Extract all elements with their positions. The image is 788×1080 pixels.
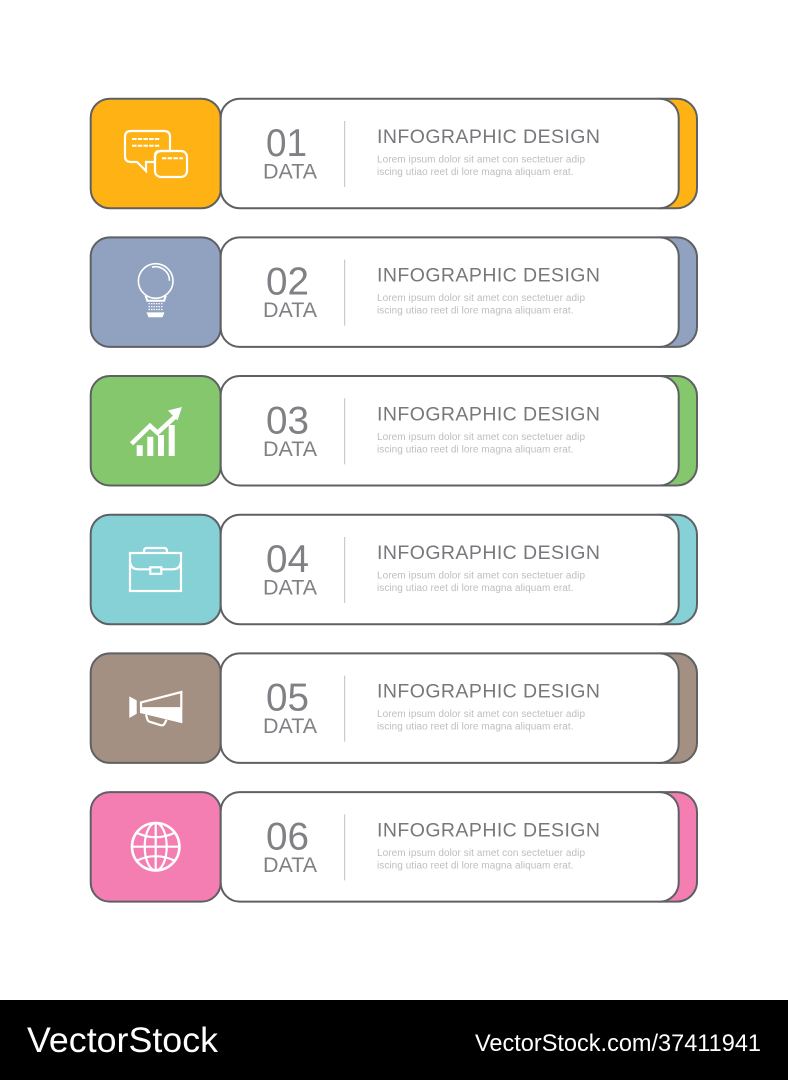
body text: Lorem ipsum dolor sit amet con sectetuer adip <box>377 154 585 166</box>
body text: Lorem ipsum dolor sit amet con sectetuer adip <box>377 570 585 582</box>
body text: iscing utiao reet di lore magna aliquam erat. <box>377 860 574 871</box>
heading: INFOGRAPHIC DESIGN <box>377 542 600 564</box>
body text: Lorem ipsum dolor sit amet con sectetuer adip <box>377 848 585 859</box>
number 01: 01 <box>266 122 307 165</box>
label DATA: DATA <box>263 299 317 322</box>
divider <box>344 676 345 742</box>
back tab: green <box>640 376 697 486</box>
icon panel: brown <box>91 653 221 763</box>
icon panel: teal <box>91 515 221 624</box>
row 03 <box>91 376 697 486</box>
icon panel: blue <box>91 237 221 347</box>
body text: Lorem ipsum dolor sit amet con sectetuer adip <box>377 432 585 443</box>
footer background <box>0 1000 788 1080</box>
divider <box>344 260 345 326</box>
heading: INFOGRAPHIC DESIGN <box>377 819 600 841</box>
number 06: 06 <box>266 815 309 858</box>
row 01 <box>91 99 697 208</box>
icon: megaphone <box>129 692 182 725</box>
back tab: blue <box>640 237 697 347</box>
back tab: orange <box>640 99 697 208</box>
row 02 <box>91 237 697 347</box>
body text: iscing utiao reet di lore magna aliquam erat. <box>377 306 574 317</box>
heading: INFOGRAPHIC DESIGN <box>377 403 600 425</box>
icon: globe <box>132 823 179 870</box>
number 04: 04 <box>266 538 309 581</box>
label DATA: DATA <box>263 438 317 461</box>
number 02: 02 <box>266 261 309 304</box>
row 05 <box>91 653 697 763</box>
heading: INFOGRAPHIC DESIGN <box>377 681 600 703</box>
label DATA: DATA <box>263 160 317 184</box>
number 05: 05 <box>266 677 309 720</box>
icon: briefcase <box>130 548 181 591</box>
back tab: pink <box>640 792 697 902</box>
body text: iscing utiao reet di lore magna aliquam erat. <box>377 722 574 733</box>
footer bar <box>0 1000 788 1080</box>
row 06 <box>91 792 697 902</box>
divider <box>344 814 345 880</box>
brand name: VectorStock <box>27 1021 219 1060</box>
heading: INFOGRAPHIC DESIGN <box>377 126 600 148</box>
body text: iscing utiao reet di lore magna aliquam erat. <box>377 583 574 594</box>
icon panel: orange <box>91 99 221 208</box>
heading: INFOGRAPHIC DESIGN <box>377 265 600 287</box>
icon panel: green <box>91 376 221 486</box>
label DATA: DATA <box>263 576 317 600</box>
image URL: VectorStock.com/37411941 <box>475 1030 761 1057</box>
body text: iscing utiao reet di lore magna aliquam erat. <box>377 167 574 178</box>
icon panel: pink <box>91 792 221 902</box>
body text: iscing utiao reet di lore magna aliquam erat. <box>377 444 574 455</box>
divider <box>344 537 345 603</box>
back tab: teal <box>640 515 697 624</box>
label DATA: DATA <box>263 715 317 738</box>
content card <box>221 515 679 624</box>
content card <box>221 376 679 486</box>
divider <box>344 121 345 187</box>
label DATA: DATA <box>263 854 317 877</box>
body text: Lorem ipsum dolor sit amet con sectetuer adip <box>377 709 585 720</box>
back tab: brown <box>640 653 697 763</box>
content card <box>221 99 679 208</box>
number 03: 03 <box>266 399 309 442</box>
body text: Lorem ipsum dolor sit amet con sectetuer adip <box>377 293 585 304</box>
icon: light bulb <box>138 264 173 317</box>
row 04 <box>91 515 697 624</box>
divider <box>344 398 345 464</box>
icon: chat bubbles <box>125 131 187 177</box>
content card <box>221 653 679 763</box>
content card <box>221 792 679 902</box>
content card <box>221 237 679 347</box>
icon: rising chart <box>132 407 182 456</box>
